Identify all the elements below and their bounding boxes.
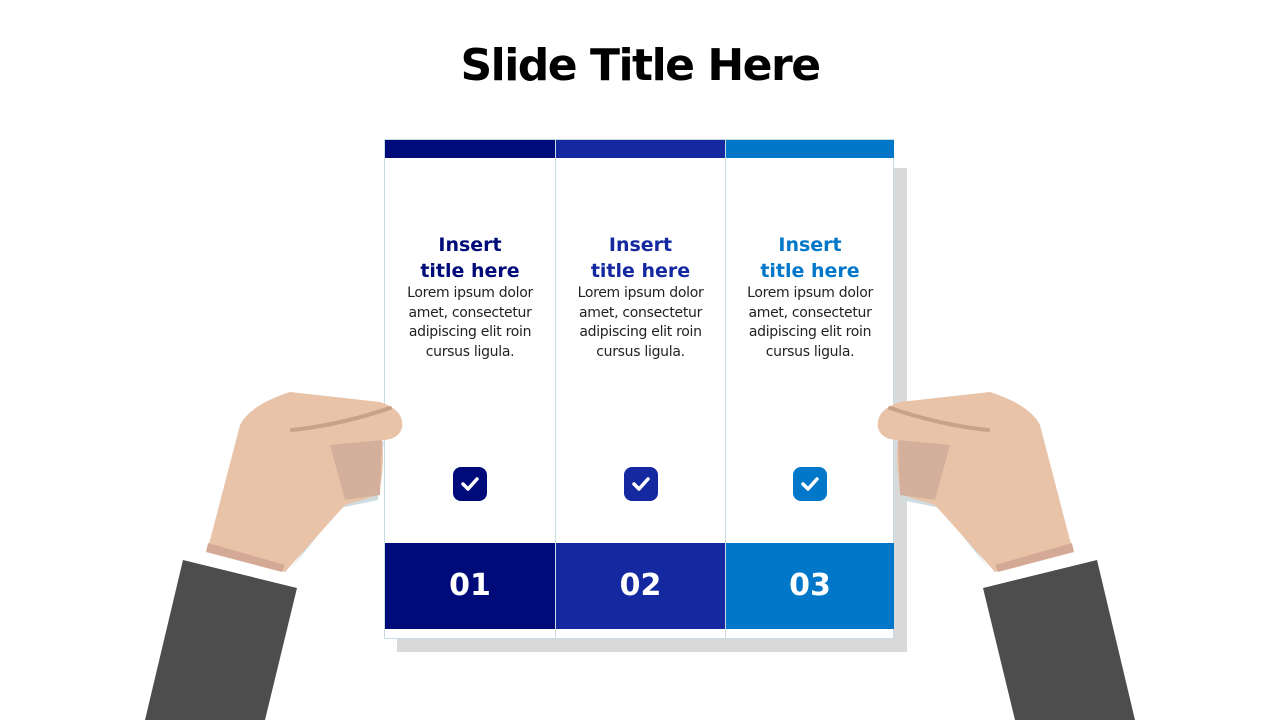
- title 1: [420, 234, 520, 282]
- number 03: 03: [789, 568, 831, 603]
- icon: check 3: [793, 467, 827, 501]
- text 3: Lorem ipsum dolor amet, consectetur adipiscing elit roin cursus ligula.: [747, 285, 873, 360]
- number 02: [556, 543, 725, 629]
- icon: check 1: [453, 467, 487, 501]
- title 2: title here: [591, 260, 690, 282]
- icon: check 2: [624, 467, 658, 501]
- column 1: [385, 140, 555, 629]
- number 02: 02: [620, 568, 661, 603]
- title 3: title here: [760, 260, 860, 282]
- title 1: Insert: [438, 234, 502, 256]
- title 1: title here: [420, 260, 520, 282]
- number 01: 01: [449, 568, 491, 603]
- right hand: [878, 392, 1135, 720]
- title 2: Insert: [609, 234, 672, 256]
- column 3: [725, 140, 894, 638]
- left hand: [145, 392, 402, 720]
- column 2: [555, 140, 725, 638]
- paper: [384, 139, 894, 639]
- title 3: [760, 234, 860, 282]
- number 01: [385, 543, 555, 629]
- paper shadow: [397, 168, 907, 652]
- text 1: Lorem ipsum dolor amet, consectetur adipiscing elit roin cursus ligula.: [407, 285, 533, 360]
- text 2: Lorem ipsum dolor amet, consectetur adipiscing elit roin cursus ligula.: [578, 285, 703, 360]
- number 03: [726, 543, 894, 629]
- title 3: Insert: [778, 234, 842, 256]
- title: Slide Title Here: [460, 40, 820, 91]
- title 2: [591, 234, 690, 282]
